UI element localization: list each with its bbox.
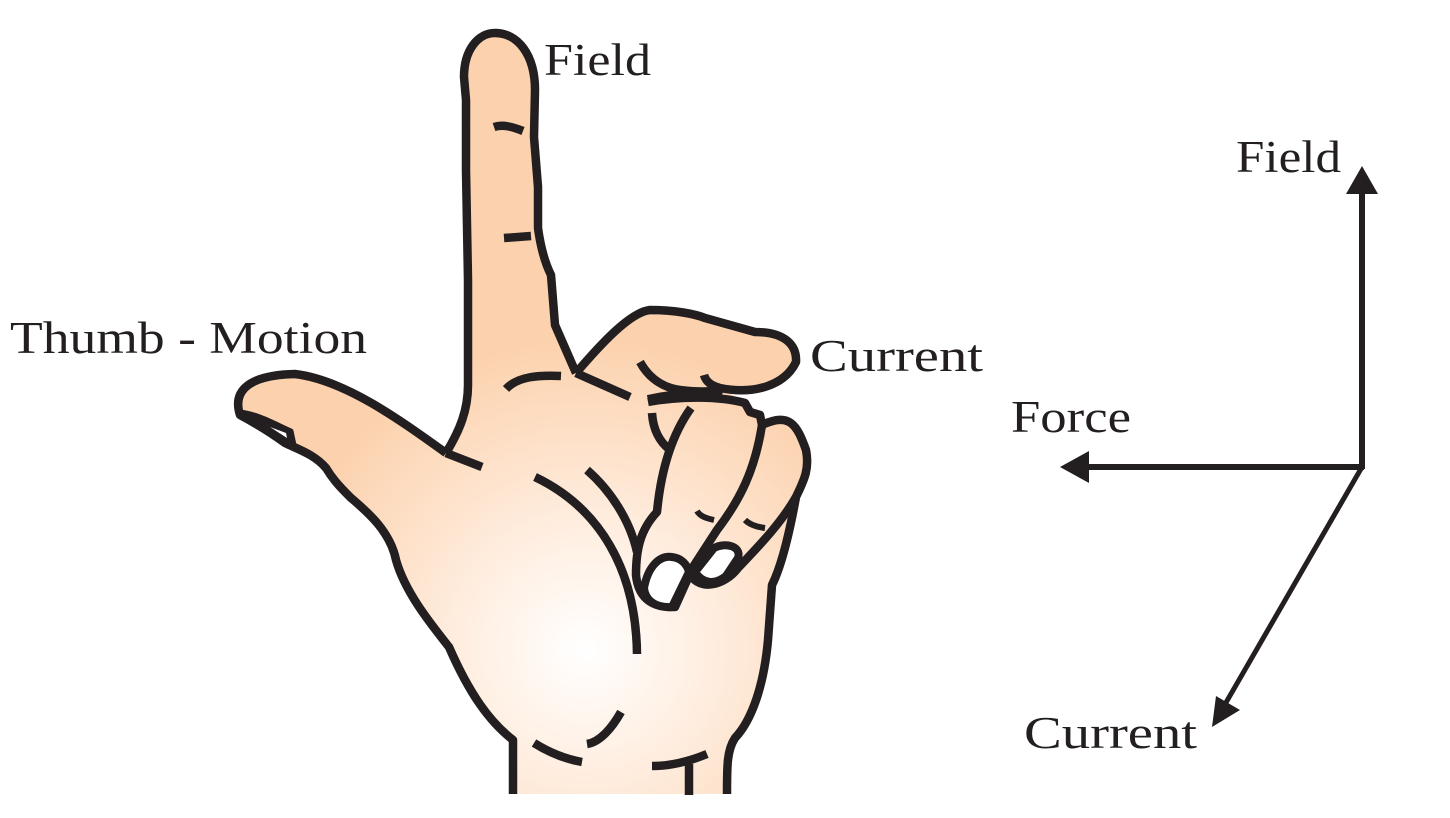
ring nail bbox=[644, 557, 689, 607]
knuckle creases bbox=[697, 511, 714, 520]
arrow: field bbox=[1346, 166, 1378, 469]
wrist and left side outline bbox=[238, 374, 513, 794]
little finger bbox=[727, 420, 807, 794]
label: Field: Field bbox=[1236, 132, 1341, 182]
axes diagram bbox=[1011, 132, 1378, 758]
label: Field (finger): Field bbox=[544, 35, 651, 85]
little nail bbox=[695, 545, 739, 582]
folded ring finger bbox=[636, 398, 762, 607]
index finger creases bbox=[494, 126, 523, 131]
arrow: force bbox=[1060, 451, 1364, 483]
label: Current: Current bbox=[1024, 708, 1198, 758]
middle finger extended bbox=[576, 310, 796, 390]
hand outline bbox=[238, 33, 807, 795]
palm creases bbox=[506, 376, 561, 389]
hand skin fill bbox=[238, 33, 807, 794]
arrow: current bbox=[1212, 467, 1362, 727]
label: Current (finger): Current bbox=[810, 331, 984, 381]
label: Force: Force bbox=[1011, 392, 1131, 442]
index finger outline bbox=[446, 33, 576, 453]
thumb nail bbox=[240, 412, 294, 445]
label: Thumb - Motion: Thumb - Motion bbox=[10, 313, 367, 363]
icon: hand bbox=[238, 33, 807, 795]
wrist creases bbox=[534, 743, 582, 762]
